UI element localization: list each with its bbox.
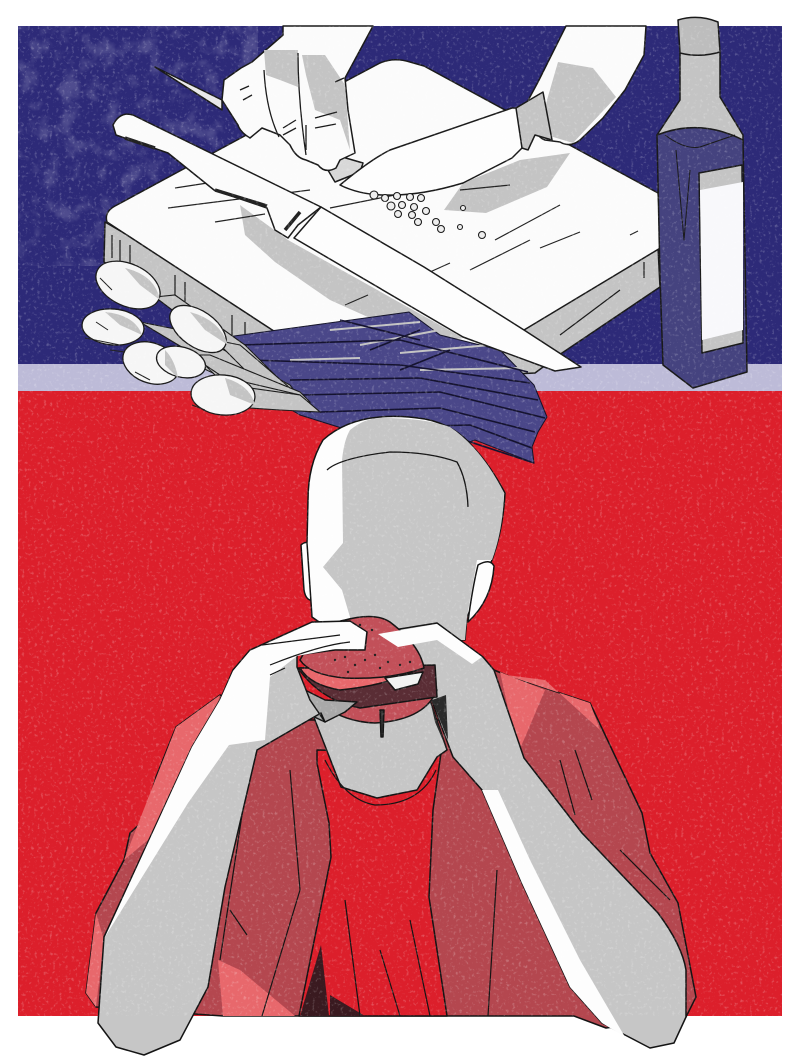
board side (104, 222, 660, 385)
right hand (524, 26, 646, 145)
bottle label (699, 165, 743, 353)
chef knife blade (340, 108, 528, 195)
bottle inner shading (665, 135, 735, 240)
shirt light patch: lower left sleeve (86, 913, 104, 1007)
panel: red background (18, 391, 782, 1016)
board shadow: chef knife (444, 153, 570, 213)
bottle cap (678, 17, 720, 55)
onion bulb roots (85, 278, 205, 410)
hairline stroke (327, 452, 468, 507)
onion green lines (240, 320, 545, 463)
bottle label white (700, 182, 743, 340)
burger cheese (385, 672, 423, 690)
burger sesame seeds (334, 624, 411, 673)
shirt light patch: lower left (218, 960, 295, 1016)
small knife and left hand (155, 26, 373, 182)
panel: blue background (18, 26, 782, 364)
board top (106, 60, 662, 352)
long knife (113, 114, 581, 371)
right forearm white edge (482, 790, 625, 1037)
cutting board (104, 60, 662, 385)
burger top bun (300, 616, 424, 678)
small knife blade (155, 67, 222, 110)
left hand and forearm white area (105, 622, 366, 937)
chef knife handle (516, 92, 552, 150)
onion stems (140, 295, 320, 412)
neck (313, 700, 447, 798)
burger tomato (300, 668, 420, 690)
long knife handle shading (125, 138, 300, 230)
blue mottled texture (18, 26, 258, 266)
onion bulbs (81, 252, 257, 418)
burger drip (380, 710, 384, 737)
shirt light patch: collar right (500, 672, 545, 753)
burger lettuce (293, 690, 357, 722)
ear: right (468, 562, 494, 622)
shirt (86, 670, 696, 1028)
board side hatching (112, 235, 644, 345)
head hair base (307, 416, 505, 640)
t-shirt dark fold (300, 945, 365, 1016)
burger bottom bun (322, 690, 437, 723)
burger (293, 616, 437, 737)
bottle neck glass (657, 52, 743, 143)
chef knife and right hand (340, 26, 646, 238)
right hand shadow (540, 62, 616, 143)
onion greens (227, 312, 547, 463)
panel: lavender band (18, 364, 782, 391)
left hand (222, 26, 373, 170)
onion bulb shading (105, 268, 255, 405)
board shadow: long knife (240, 205, 463, 345)
shirt light patch: left sleeve (124, 695, 220, 860)
chopped pieces (370, 191, 486, 238)
collar lines (325, 760, 436, 805)
head grey (323, 418, 504, 640)
right arm and hand (375, 623, 686, 1048)
shirt light patch: right sleeve (506, 675, 600, 730)
bottle body (657, 128, 747, 388)
right hand shadow (430, 695, 448, 750)
ear: left (301, 542, 314, 600)
t-shirt (299, 750, 447, 1016)
long knife handle (113, 114, 321, 238)
burger patty (298, 665, 437, 708)
left hand finger lines (262, 635, 350, 675)
shirt fold lines (220, 750, 670, 1016)
long knife blade (294, 207, 581, 371)
spring onions (81, 252, 547, 463)
left arm and hand (98, 621, 367, 1055)
person (86, 416, 696, 1055)
small knife handle (322, 152, 363, 182)
onion green gaps (290, 322, 520, 370)
left hand fingers (240, 53, 344, 155)
board wood grain (168, 178, 638, 305)
bottle (657, 17, 747, 388)
right hand highlight (378, 624, 482, 664)
left hand shadow (264, 50, 350, 150)
